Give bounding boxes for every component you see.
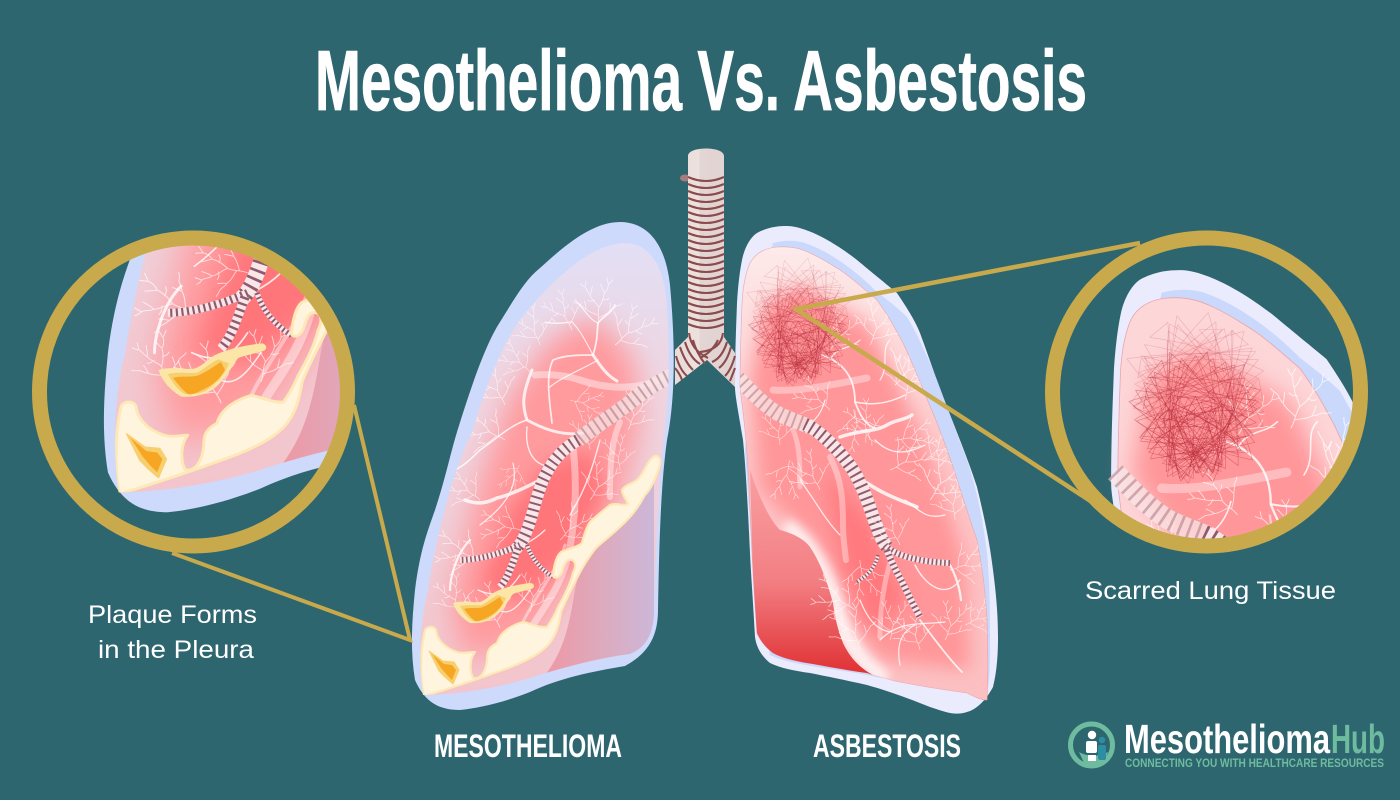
- callout: plaque magnifier: [32, 230, 413, 644]
- logo: Mesothelioma Hub: [1070, 716, 1385, 770]
- right lung: asbestosis: [729, 226, 1005, 714]
- left lung: mesothelioma: [412, 222, 680, 710]
- label: plaque forms in the pleura: [88, 601, 257, 664]
- label: asbestosis: ASBESTOSIS: [813, 728, 961, 764]
- logo: Mesothelioma Hub: Mesothelioma: [1124, 716, 1331, 762]
- bronchi right, lower: [857, 545, 950, 617]
- leader lines: [172, 405, 410, 640]
- label: plaque forms in the pleura: Plaque Forms: [88, 601, 257, 629]
- leader lines: [796, 243, 1140, 502]
- trachea: [675, 148, 735, 387]
- label: mesothelioma: MESOTHELIOMA: [434, 728, 622, 764]
- label: scarred lung tissue: Scarred Lung Tissue: [1085, 577, 1336, 605]
- logo icon: [1070, 724, 1112, 766]
- label: plaque forms in the pleura: in the Pleura: [98, 636, 254, 664]
- callout: scar magnifier: [790, 230, 1368, 554]
